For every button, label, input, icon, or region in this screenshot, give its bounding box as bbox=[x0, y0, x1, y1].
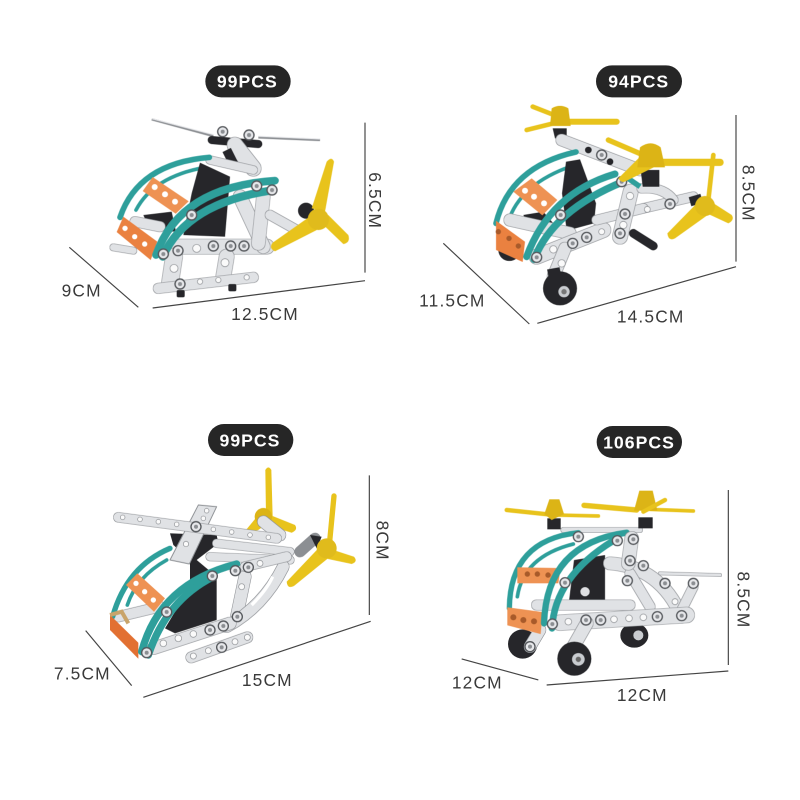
helicopter illustration 4 bbox=[507, 491, 720, 676]
dimension: width 7.5CM bbox=[54, 631, 132, 686]
helicopter illustration 2 bbox=[496, 106, 733, 305]
helicopter illustration 1 bbox=[113, 119, 349, 297]
dimension: length 14.5CM: 14.5CM bbox=[617, 307, 685, 327]
dimension: width 9CM bbox=[62, 247, 138, 307]
dimension: length 12CM: 12CM bbox=[617, 685, 668, 705]
dimension: length 12.5CM: 12.5CM bbox=[231, 304, 299, 324]
badge: 106PCS bbox=[597, 426, 682, 458]
badge: 94PCS: 94PCS bbox=[608, 72, 669, 92]
dimension: height 8.5CM: 8.5CM bbox=[733, 572, 753, 628]
dimension: length 12CM bbox=[547, 671, 728, 705]
dimension: length 15CM: 15CM bbox=[242, 670, 293, 690]
dimension: height 8CM: 8CM bbox=[373, 521, 393, 561]
dimension: height 8.5CM: 8.5CM bbox=[738, 165, 758, 222]
dimension: width 12CM: 12CM bbox=[452, 673, 503, 693]
dimension: width 9CM: 9CM bbox=[62, 281, 102, 301]
panel: model 4, 106 pieces bbox=[452, 426, 753, 705]
dimension: width 7.5CM: 7.5CM bbox=[54, 663, 111, 683]
badge: 99PCS: 99PCS bbox=[220, 430, 280, 450]
dimension: height 6.5CM: 6.5CM bbox=[365, 172, 385, 229]
panel: model 2, 94 pieces bbox=[419, 65, 758, 327]
badge: 106PCS: 106PCS bbox=[603, 432, 675, 452]
badge: 99PCS bbox=[205, 65, 291, 97]
helicopter illustration 3 bbox=[110, 467, 356, 659]
dimension: width 11.5CM: 11.5CM bbox=[419, 291, 486, 311]
dimension: width 11.5CM bbox=[419, 243, 529, 324]
dimension: length 14.5CM bbox=[537, 267, 736, 327]
dimension: width 12CM bbox=[452, 659, 538, 693]
badge: 94PCS bbox=[596, 65, 682, 97]
dimension: length 15CM bbox=[143, 621, 371, 697]
badge: 99PCS: 99PCS bbox=[217, 72, 278, 92]
panel: model 1, 99 pieces bbox=[62, 65, 385, 324]
dimension: length 12.5CM bbox=[153, 281, 365, 324]
badge: 99PCS bbox=[208, 424, 293, 456]
panel: model 3, 99 pieces bbox=[54, 424, 393, 697]
dimension: height 8CM bbox=[369, 475, 393, 615]
